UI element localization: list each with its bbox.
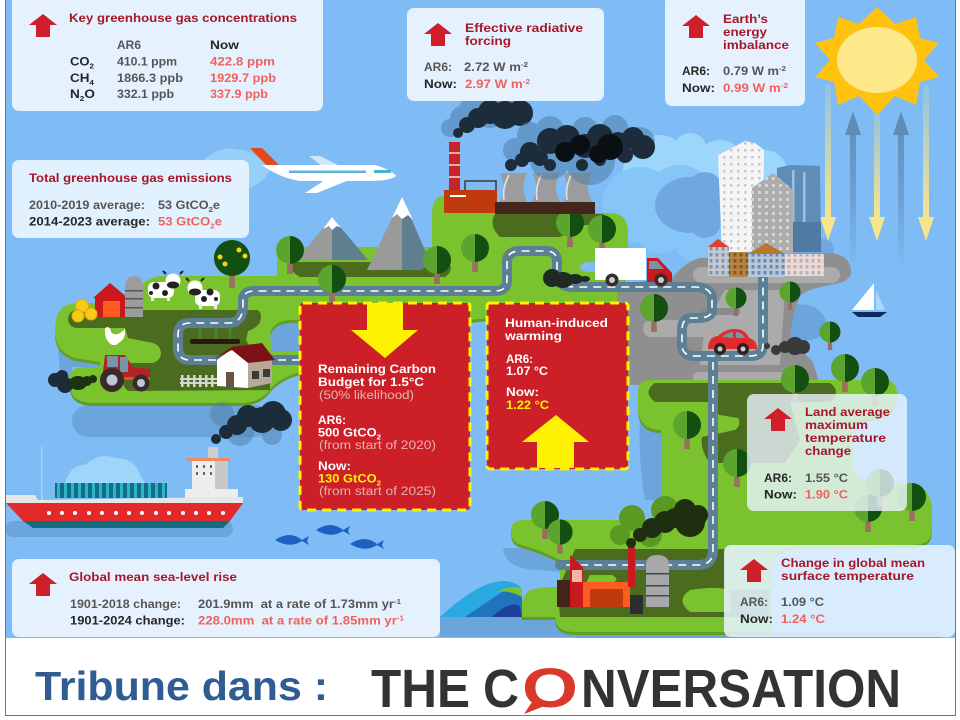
fish: [275, 525, 384, 549]
values: 2.72 W m: [464, 62, 514, 74]
land: dark green patches: [68, 310, 270, 391]
concentration table: Now: [210, 40, 239, 52]
land: gray city area: [617, 253, 851, 385]
factory building: [444, 181, 497, 213]
truck: [595, 248, 672, 286]
text: budget now: Now:: [318, 461, 351, 473]
heading: temperature: [805, 433, 886, 445]
values: [70, 599, 404, 628]
ocean wave: [440, 581, 522, 617]
icon: farmhouse: [212, 343, 275, 388]
text: budget AR6: (from start of 2020): [319, 440, 436, 452]
text: budget AR6: [318, 415, 436, 452]
icon: chicken: [105, 327, 125, 345]
sun: [815, 7, 939, 115]
icon: up arrow: [29, 14, 57, 37]
concentration table: 2: [90, 64, 94, 70]
text: budget AR6: 2: [377, 434, 381, 442]
values: 1.90 °C: [805, 490, 848, 502]
panel: change in global mean surface temperature: [724, 545, 955, 637]
text: budget heading: (50% likelihood): [319, 390, 414, 402]
heading: Global mean sea-level rise: [69, 572, 237, 584]
smoke: cooling towers: [503, 115, 655, 185]
text: warming values: Now:: [506, 387, 539, 399]
text: budget AR6: 500 GtCO: [318, 428, 370, 440]
concentration table: 1866.3 ppb: [117, 73, 183, 85]
values: 2.97 W m: [465, 79, 515, 91]
text: warming values: 1.22 °C: [506, 400, 549, 412]
hull: [6, 503, 243, 521]
cooling tower highlights: [504, 175, 571, 200]
text: warming heading: Human-induced: [505, 318, 608, 330]
text: warming values: [506, 354, 549, 412]
icon: cow left: [148, 271, 183, 301]
heading: Earth’s: [723, 14, 768, 26]
panel: total greenhouse gas emissions: [12, 160, 249, 238]
footer: The Conversation logo: NVERSATION: [581, 659, 901, 719]
solar and reflected radiation arrows: [820, 85, 934, 270]
heading: Land average: [805, 407, 890, 419]
footer: tribune text: Tribune dans :: [35, 663, 328, 709]
values: 2014-2023 average:: [29, 216, 150, 228]
smoke: truck exhaust: [543, 269, 590, 288]
text: warming heading: warming: [504, 331, 562, 343]
concentration table: CO: [70, 56, 87, 68]
values: [764, 473, 848, 502]
red panel: remaining carbon budget: [300, 303, 470, 510]
footer: The Conversation logo: C: [483, 659, 519, 719]
text: budget heading: [318, 364, 436, 402]
values: [740, 597, 825, 626]
icon: up arrow: [424, 23, 452, 46]
heading: [805, 407, 890, 458]
values: 2: [209, 207, 213, 214]
text: budget heading: Remaining Carbon: [318, 364, 436, 376]
concentration table: 422.8 ppm: [210, 56, 275, 68]
land: main green farm and top strip: [55, 195, 628, 406]
heading: Effective radiative: [465, 23, 583, 35]
text: warming heading: [504, 318, 608, 343]
values: -2: [523, 79, 530, 86]
values: -2: [781, 83, 788, 90]
heading: imbalance: [723, 40, 789, 52]
concentration table: 2: [80, 96, 85, 103]
heading: maximum: [805, 420, 868, 432]
mountains: [297, 197, 430, 270]
values: 2: [210, 224, 215, 230]
smoke: tractor exhaust: [48, 370, 97, 393]
heading: [465, 23, 583, 48]
values: AR6:: [682, 66, 710, 78]
land: right and bottom green island: [511, 380, 932, 635]
smoke: car exhaust: [764, 337, 810, 355]
logo: red speech-bubble O: O: [522, 656, 578, 719]
panel: effective radiative forcing: [407, 8, 604, 101]
footer: The Conversation logo: THE: [371, 659, 470, 719]
values: [682, 66, 788, 95]
smoke: ship funnel: [210, 401, 292, 446]
heading: [781, 558, 925, 583]
text: budget heading: Budget for 1.5°C: [318, 377, 424, 389]
concentration table: AR6: [117, 40, 141, 52]
text: warming values: 1.07 °C: [506, 366, 548, 378]
text: budget now: (from start of 2025): [319, 486, 436, 498]
icon: crop bed: [190, 326, 240, 344]
heading: change: [805, 446, 851, 458]
text: budget now: 2: [377, 480, 381, 488]
mast: [41, 447, 42, 502]
icon: barn: [93, 283, 128, 317]
red car: [708, 329, 757, 355]
concentration table: O: [84, 89, 95, 101]
values: Now:: [740, 614, 773, 626]
icon: up arrow: [682, 15, 710, 38]
cooling towers: [500, 173, 592, 202]
icon: cow right: [186, 278, 220, 309]
concentration table: N: [70, 89, 78, 101]
water shadows under the land: [5, 304, 940, 638]
concentration table: CH: [70, 73, 87, 85]
heading: [723, 14, 789, 52]
values: [424, 62, 530, 91]
values: -2: [779, 66, 786, 73]
icon: up arrow: [29, 573, 57, 596]
values: Now:: [764, 490, 797, 502]
heading: Total greenhouse gas emissions: [29, 173, 232, 185]
values: 53 GtCO: [158, 216, 204, 228]
icon: silo: [125, 276, 143, 317]
smoke: bottom factory: [610, 496, 708, 548]
background cloud: [65, 456, 145, 483]
panel: earth's energy imbalance: [665, 0, 805, 106]
values: Now:: [682, 83, 715, 95]
text: budget now: [318, 461, 436, 498]
values: 53 GtCO: [158, 200, 204, 212]
cargo ship: [6, 447, 243, 528]
values: 1.24 °C: [781, 614, 825, 626]
background clouds behind the city: [602, 133, 834, 263]
concentration table: 337.9 ppb: [210, 89, 268, 101]
values: e: [215, 216, 222, 228]
trees: [214, 209, 926, 554]
values: 1.55 °C: [805, 473, 848, 485]
city skyline: [708, 141, 824, 277]
icon: yellow up arrow: [522, 415, 589, 468]
values: [29, 200, 222, 230]
factory base: [495, 202, 595, 214]
values: e: [213, 200, 220, 212]
containers: [55, 483, 167, 498]
concentration table: [70, 40, 276, 103]
icon: tractor: [100, 355, 150, 392]
text: budget AR6: AR6:: [318, 415, 346, 427]
panel: land average maximum temperature change: [747, 394, 907, 511]
values: AR6:: [740, 597, 768, 609]
factory on bottom island: [557, 547, 669, 614]
heading: energy: [723, 27, 768, 39]
values: 1.09 °C: [781, 597, 824, 609]
values: 0.99 W m: [723, 83, 773, 95]
values: 1901-2024 change:: [70, 616, 185, 628]
values: -1: [397, 616, 404, 622]
icon: yellow down arrow: [351, 303, 418, 358]
factory on top island: [444, 142, 595, 214]
smoke: top factory chimney: [441, 86, 533, 138]
values: 0.79 W m: [723, 66, 773, 78]
footer: The Conversation logo: [371, 656, 901, 719]
heading: Change in global mean: [781, 558, 925, 570]
icon: up arrow: [764, 408, 792, 431]
values: -2: [521, 62, 528, 69]
concentration table: 4: [89, 80, 94, 87]
values: -1: [394, 599, 401, 606]
panel: key greenhouse gas concentrations: [12, 0, 323, 111]
concentration table: 332.1 ppb: [117, 89, 174, 101]
airplane: [195, 148, 396, 195]
values: 228.0mm at a rate of 1.85mm yr: [198, 616, 372, 628]
values: AR6:: [764, 473, 792, 485]
concentration table: 410.1 ppm: [117, 56, 177, 68]
deck: [6, 495, 243, 503]
heading: surface temperature: [781, 571, 914, 583]
chimney: [449, 142, 460, 190]
road network: [178, 251, 763, 565]
farm: [72, 271, 275, 392]
icon: fence: [180, 375, 217, 387]
concentration table: 1929.7 ppb: [210, 73, 276, 85]
values: 201.9mm at a rate of 1.73mm yr: [198, 599, 372, 611]
red panel: human-induced warming: [487, 303, 628, 469]
bridge: [185, 447, 238, 498]
icon: hay bales: [72, 300, 97, 322]
heading: Key greenhouse gas concentrations: [69, 13, 297, 25]
values: Now:: [424, 79, 457, 91]
icon: up arrow: [740, 559, 768, 582]
heading: forcing: [465, 36, 511, 48]
footer band: [5, 638, 955, 716]
sailboat: [852, 283, 887, 317]
text: budget now: 130 GtCO: [318, 474, 370, 486]
text: warming values: AR6:: [506, 354, 533, 366]
values: AR6:: [424, 62, 452, 74]
values: 1901-2018 change:: [70, 599, 181, 611]
panel: global mean sea-level rise: [12, 559, 440, 637]
values: 2010-2019 average:: [29, 200, 145, 212]
